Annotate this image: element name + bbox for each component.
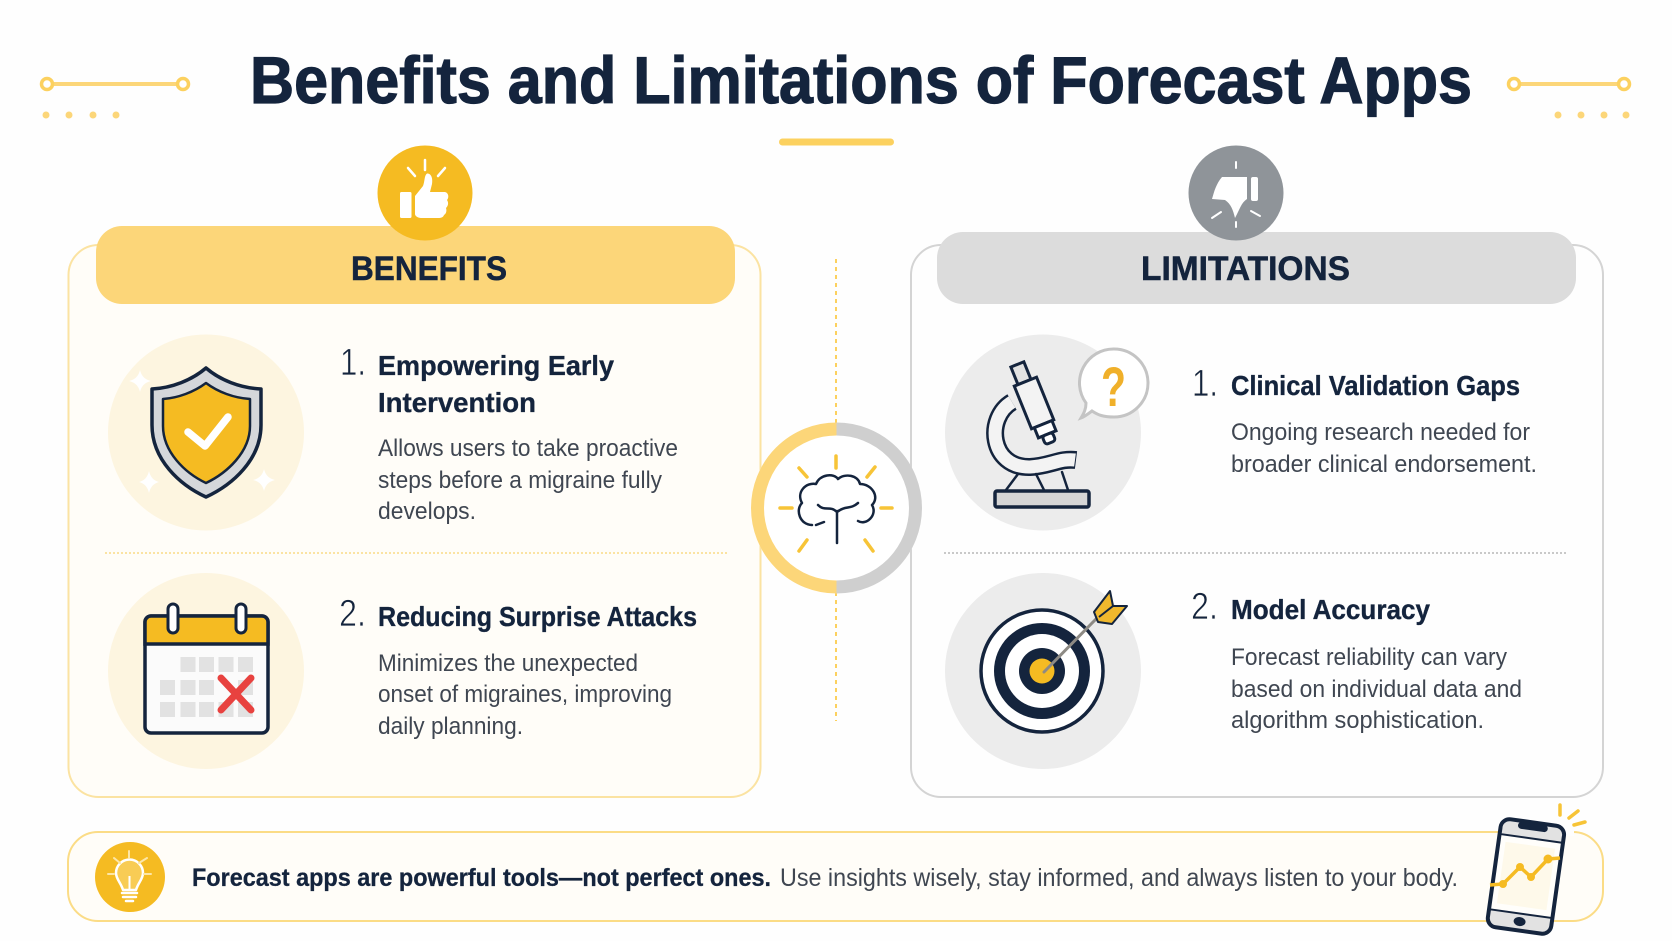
- benefit 2 heading: Reducing Surprise Attacks: [378, 601, 697, 632]
- limitation 1 heading: Clinical Validation Gaps: [1231, 370, 1520, 401]
- centre dashed connector: [835, 259, 837, 721]
- limitation 1 text: [1192, 363, 1537, 478]
- takeaway message: Forecast apps are powerful tools—not perfect ones.: [192, 864, 771, 892]
- limitation 2 description: based on individual data and: [1231, 676, 1522, 703]
- benefit 2 description: daily planning.: [378, 713, 523, 740]
- benefit 1 description: Allows users to take proactive: [378, 435, 678, 462]
- limitation 2 text: [1191, 586, 1522, 734]
- decoration: left connector and dots: [42, 78, 188, 118]
- number 2: 2.: [1191, 586, 1218, 628]
- benefit 1 text: [340, 342, 678, 525]
- benefits heading: BENEFITS: [351, 250, 507, 288]
- takeaway message: Use insights wisely, stay informed, and always listen to your body.: [780, 864, 1458, 892]
- benefit 1 heading: Intervention: [378, 387, 536, 418]
- title: Benefits and Limitations of Forecast Apps: [250, 43, 1472, 117]
- icon: thumbs down: [1188, 146, 1284, 240]
- limitation 2 description: algorithm sophistication.: [1231, 707, 1484, 734]
- number 1: 1.: [340, 342, 366, 384]
- icon: brain: [780, 456, 892, 551]
- panel: benefits: [68, 146, 760, 797]
- limitation 2 heading: Model Accuracy: [1231, 594, 1430, 625]
- icon: microscope: [995, 360, 1089, 507]
- icon: question speech bubble: ?: [1101, 355, 1126, 418]
- number 1: 1.: [1192, 363, 1218, 405]
- limitation 1 illustration circle: [945, 334, 1141, 530]
- takeaway bar: [68, 805, 1603, 935]
- central brain badge: [751, 422, 922, 594]
- benefit 1 description: develops.: [378, 498, 476, 525]
- limitation 2 description: Forecast reliability can vary: [1231, 644, 1507, 671]
- icon: question speech bubble: [1079, 349, 1148, 418]
- benefit 1 description: steps before a migraine fully: [378, 467, 662, 494]
- benefit 1 heading: Empowering Early: [378, 350, 614, 381]
- limitations header bar: [937, 232, 1576, 304]
- icon: shield with check: [129, 368, 275, 497]
- benefit 2 illustration circle: [108, 573, 304, 769]
- benefit 2 description: onset of migraines, improving: [378, 681, 672, 708]
- limitation 1 description: broader clinical endorsement.: [1231, 451, 1537, 478]
- decoration: right connector and dots: [1508, 78, 1630, 118]
- limitation 1 description: Ongoing research needed for: [1231, 419, 1530, 446]
- limitations heading: LIMITATIONS: [1141, 250, 1350, 288]
- panel: limitations: [911, 146, 1603, 797]
- icon: calendar with red cross: [145, 604, 268, 733]
- benefit 2 text: [339, 593, 697, 740]
- benefit 2 description: Minimizes the unexpected: [378, 650, 638, 677]
- limitation 2 illustration circle: [945, 573, 1141, 769]
- number 2: 2.: [339, 593, 366, 635]
- icon: phone with rising chart: [1487, 805, 1585, 935]
- icon: light bulb: [95, 842, 165, 912]
- icon: target with arrow: [981, 591, 1127, 732]
- title underline: [779, 138, 894, 146]
- benefits header bar: [96, 226, 735, 304]
- icon: thumbs up: [378, 146, 472, 240]
- benefit 1 illustration circle: [108, 334, 304, 530]
